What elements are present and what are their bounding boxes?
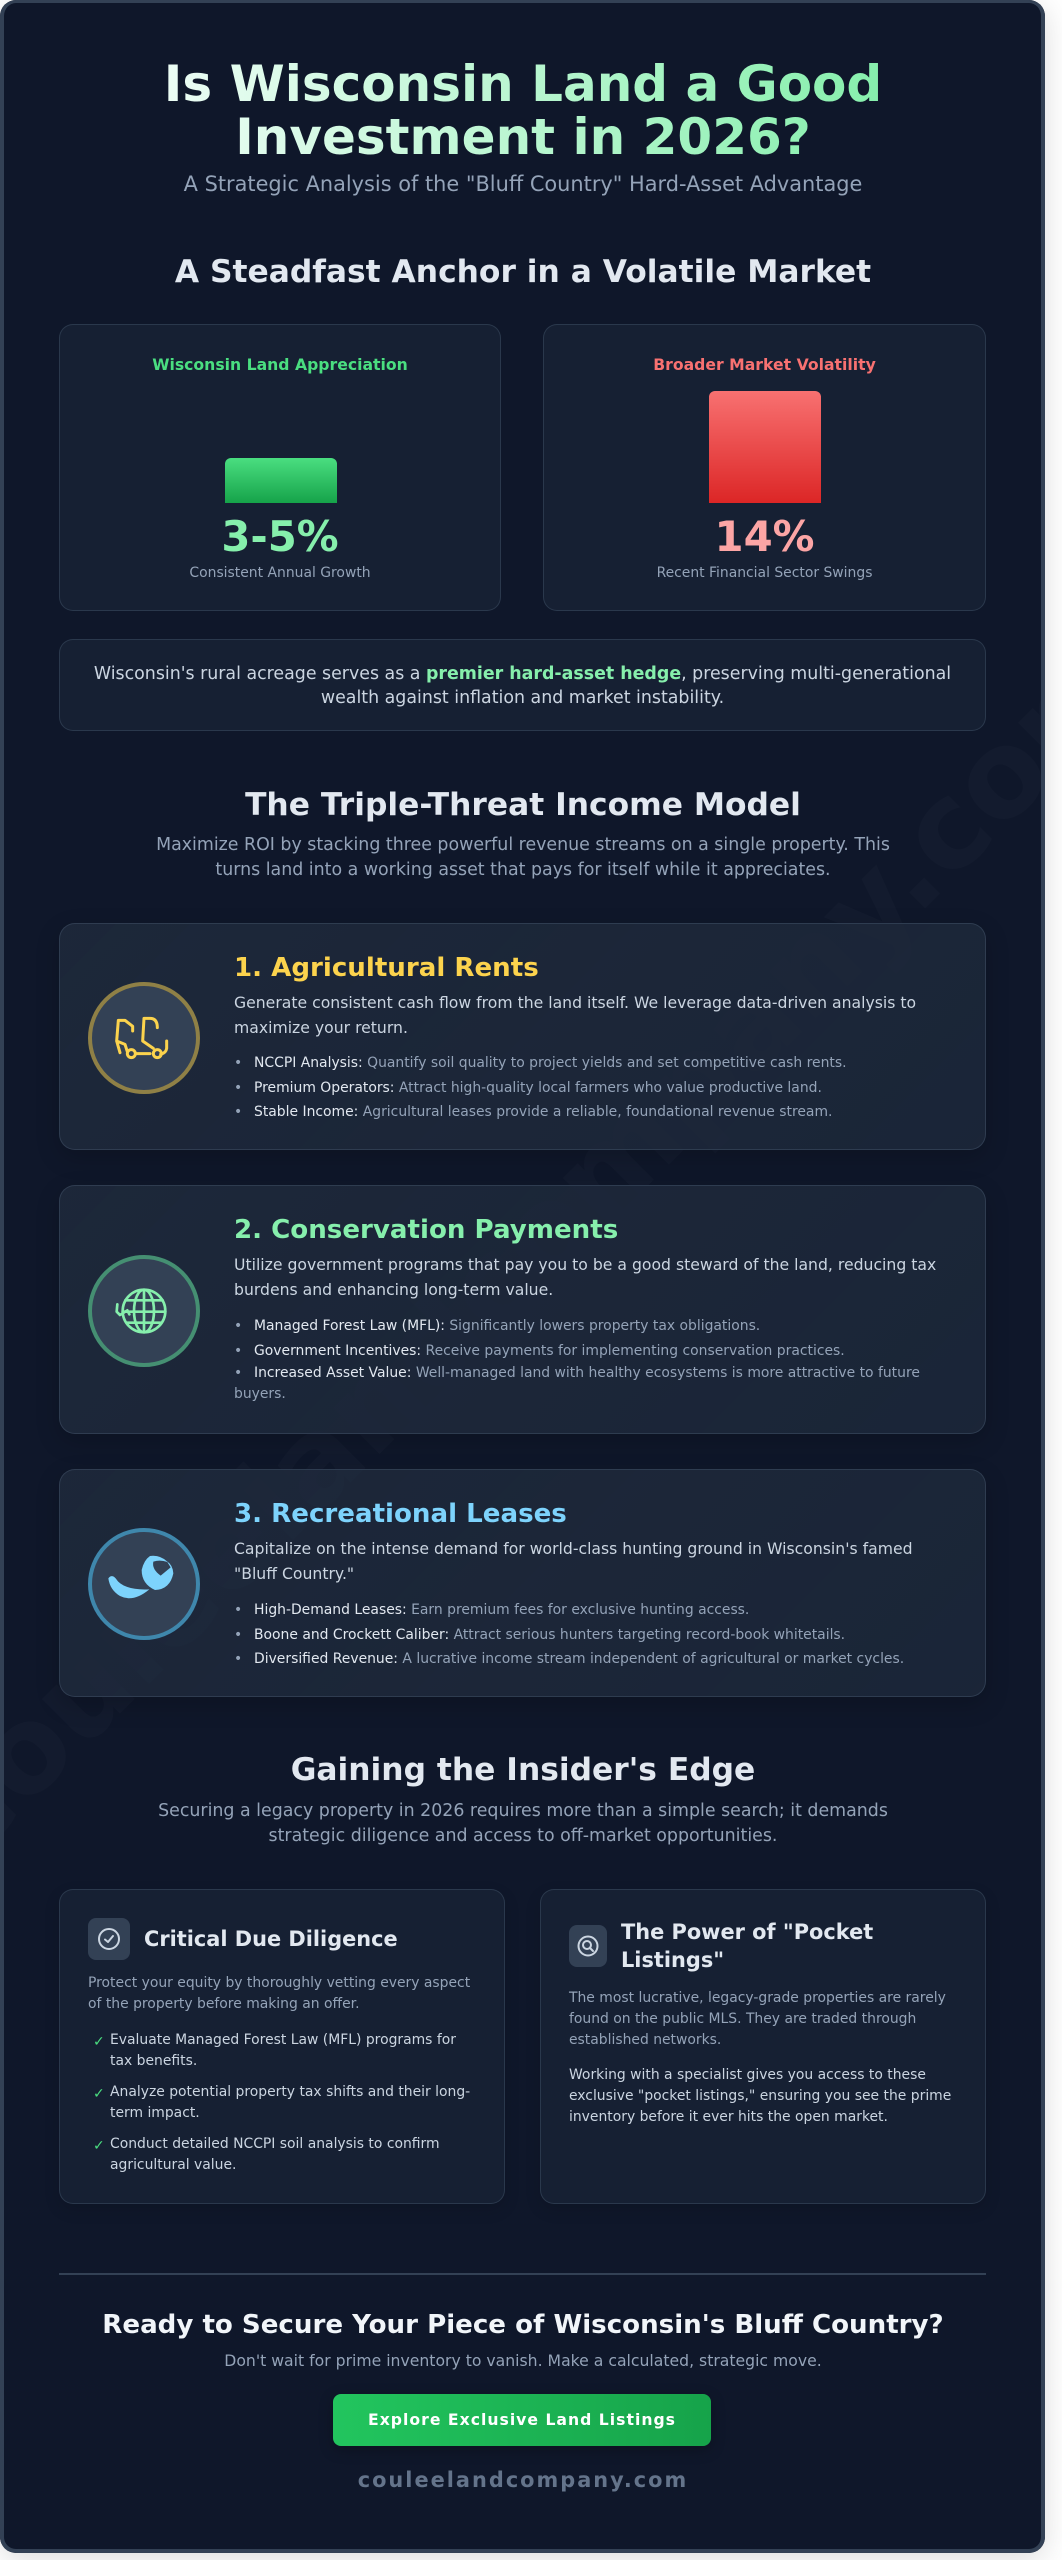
card title: Listings"	[621, 1948, 724, 1972]
title: Investment in 2026?	[235, 108, 811, 166]
stream description: burdens and enhancing long-term value.	[234, 1280, 553, 1298]
heading: steadfast anchor: A Steadfast Anchor in a Volatile Market	[175, 254, 871, 290]
bullet: government incentives: Government Incentives: Receive payments for implementing conservation practices.	[254, 1342, 845, 1358]
paragraph: public MLS	[568, 1990, 946, 2048]
icon: search badge	[569, 1925, 607, 1967]
checklist item: MFL	[110, 2032, 456, 2068]
stat value: 14%	[715, 512, 814, 561]
stat caption: Recent Financial Sector Swings	[657, 565, 872, 581]
card title: Critical Due Diligence	[144, 1927, 398, 1951]
bullet: increased asset value: •	[234, 1365, 242, 1381]
stream title: 1. Agricultural Rents	[234, 953, 539, 983]
paragraph: public MLS: found on the public MLS. They are traded through	[569, 2010, 916, 2026]
bullet: diversified revenue: Diversified Revenue: A lucrative income stream independent of agricultural or market cycles.	[254, 1651, 904, 1667]
bullet: stable income: •	[234, 1104, 242, 1120]
bullet: government incentives: •	[234, 1342, 242, 1358]
stream description: Capitalize on the intense demand for world-class hunting ground in Wisconsin's famed	[234, 1539, 913, 1558]
bullet: premium operators: Premium Operators: Attract high-quality local farmers who value productive land.	[254, 1080, 822, 1096]
bullet: increased asset value	[234, 1365, 920, 1402]
stat label: Broader Market Volatility	[653, 355, 876, 374]
stat label: Wisconsin Land Appreciation	[152, 355, 408, 374]
stream description: "Bluff Country."	[234, 1564, 354, 1582]
section intro: insider's edge	[158, 1801, 888, 1846]
stream description	[234, 1539, 913, 1582]
card title: The Power of "Pocket	[621, 1920, 873, 1944]
heading: triple-threat income model: The Triple-Threat Income Model	[245, 787, 801, 823]
stream description: maximize your return.	[234, 1018, 408, 1036]
bullet: premium operators: •	[234, 1080, 242, 1096]
panel: recreational leases	[59, 1469, 986, 1697]
bullet: managed forest law: Managed Forest Law (MFL): Significantly lowers property tax obligations.	[254, 1318, 760, 1334]
bullet: boone and crockett: Boone and Crockett Caliber: Attract serious hunters targeting record-book whitetails.	[254, 1626, 845, 1642]
subtitle: A Strategic Analysis of the "Bluff Country" Hard-Asset Advantage	[184, 172, 862, 196]
website: couleelandcompany.com	[358, 2468, 688, 2492]
checklist item: tax shifts: term impact.	[110, 2104, 200, 2120]
paragraph: public MLS: The most lucrative, legacy-grade properties are rarely	[569, 1990, 946, 2006]
stream description: Generate consistent cash flow from the land itself. We leverage data-driven analysis to	[234, 993, 916, 1012]
hedge text	[94, 664, 951, 708]
paragraph: specialist access: exclusive "pocket listings," ensuring you see the prime	[569, 2088, 951, 2104]
checklist	[93, 2032, 470, 2172]
panel: conservation payments	[59, 1185, 986, 1434]
section intro: income model: Maximize ROI by stacking three powerful revenue streams on a single property. This	[156, 835, 890, 855]
icon: tractors	[88, 982, 200, 1094]
heading: insider's edge: Gaining the Insider's Edge	[291, 1752, 755, 1788]
checklist item: tax shifts: Analyze potential property tax shifts and their long-	[110, 2084, 470, 2100]
paragraph: specialist access: Working with a specialist gives you access to these	[569, 2066, 926, 2082]
section intro: income model: turns land into a working asset that pays for itself while it appreciates.	[215, 860, 831, 880]
panel: Wisconsin land appreciation	[59, 324, 501, 611]
bullet: high-demand leases: •	[234, 1602, 242, 1618]
bullet: NCCPI analysis: •	[234, 1055, 242, 1071]
bullet: NCCPI analysis: NCCPI Analysis: Quantify soil quality to project yields and set competitive cash rents.	[254, 1055, 847, 1071]
section intro: insider's edge: Securing a legacy property in 2026 requires more than a simple search; it demands	[158, 1801, 888, 1821]
title	[164, 55, 882, 166]
panel: pocket listings	[540, 1889, 986, 2204]
stream description: Utilize government programs that pay you to be a good steward of the land, reducing tax	[234, 1255, 936, 1274]
card intro	[88, 1975, 470, 2012]
button	[333, 2394, 711, 2446]
icon: globe	[88, 1255, 200, 1367]
check mark: ✓	[93, 2138, 105, 2154]
check mark: ✓	[93, 2034, 105, 2050]
section intro: insider's edge: strategic diligence and access to off-market opportunities.	[269, 1826, 777, 1846]
stream description	[234, 1255, 936, 1298]
card title	[621, 1920, 873, 1972]
panel: agricultural rents	[59, 923, 986, 1150]
call to action text: Don't wait for prime inventory to vanish. Make a calculated, strategic move.	[224, 2351, 822, 2370]
panel: critical due diligence	[59, 1889, 505, 2204]
bullet: managed forest law: •	[234, 1318, 242, 1334]
checklist item: MFL: Evaluate Managed Forest Law (MFL) programs for	[110, 2032, 456, 2048]
card intro: Protect your equity by thoroughly vetting every aspect	[88, 1975, 470, 1991]
hedge text: Wisconsin's rural acreage serves as a premier hard-asset hedge, preserving multi-generational	[94, 664, 951, 684]
stream title: 2. Conservation Payments	[234, 1215, 618, 1245]
bar: market volatility	[709, 391, 821, 503]
paragraph: public MLS: established networks.	[569, 2032, 721, 2048]
icon: antler crescent	[88, 1528, 200, 1640]
stat caption: Consistent Annual Growth	[189, 565, 371, 581]
checklist item: soil analysis	[110, 2136, 440, 2172]
bar: land appreciation	[225, 458, 337, 503]
icon: check badge	[88, 1918, 130, 1960]
bullet: boone and crockett: •	[234, 1626, 242, 1642]
checklist item: soil analysis: agricultural value.	[110, 2156, 236, 2172]
button: Explore Exclusive Land Listings	[368, 2410, 676, 2429]
paragraph: specialist access: inventory before it ever hits the open market.	[569, 2108, 888, 2124]
panel: broader market volatility	[543, 324, 986, 611]
bullet: high-demand leases: High-Demand Leases: Earn premium fees for exclusive hunting access.	[254, 1602, 749, 1618]
check mark: ✓	[93, 2086, 105, 2102]
bullet: diversified revenue: •	[234, 1651, 242, 1667]
call to action heading: Ready to Secure Your Piece of Wisconsin's Bluff Country?	[102, 2310, 944, 2340]
hedge text: wealth against inflation and market instability.	[321, 688, 724, 708]
bullet: increased asset value: Increased Asset Value: Well-managed land with healthy ecosystems is more attractive to future	[254, 1365, 920, 1381]
panel: hedge statement	[59, 639, 986, 731]
stream title: 3. Recreational Leases	[234, 1499, 567, 1529]
title: Is Wisconsin Land a Good	[164, 55, 882, 113]
card intro: of the property before making an offer.	[88, 1996, 360, 2012]
stat value: 3-5%	[221, 512, 339, 561]
checklist item: MFL: tax benefits.	[110, 2052, 197, 2068]
paragraph: specialist access	[569, 2066, 951, 2124]
checklist item: tax shifts	[110, 2084, 470, 2120]
bullet: stable income: Stable Income: Agricultural leases provide a reliable, foundational revenue stream.	[254, 1104, 832, 1120]
stream description	[234, 993, 916, 1036]
checklist item: soil analysis: Conduct detailed NCCPI soil analysis to confirm	[110, 2136, 440, 2152]
bullet: increased asset value: buyers.	[234, 1386, 286, 1402]
section intro: income model	[156, 835, 890, 880]
